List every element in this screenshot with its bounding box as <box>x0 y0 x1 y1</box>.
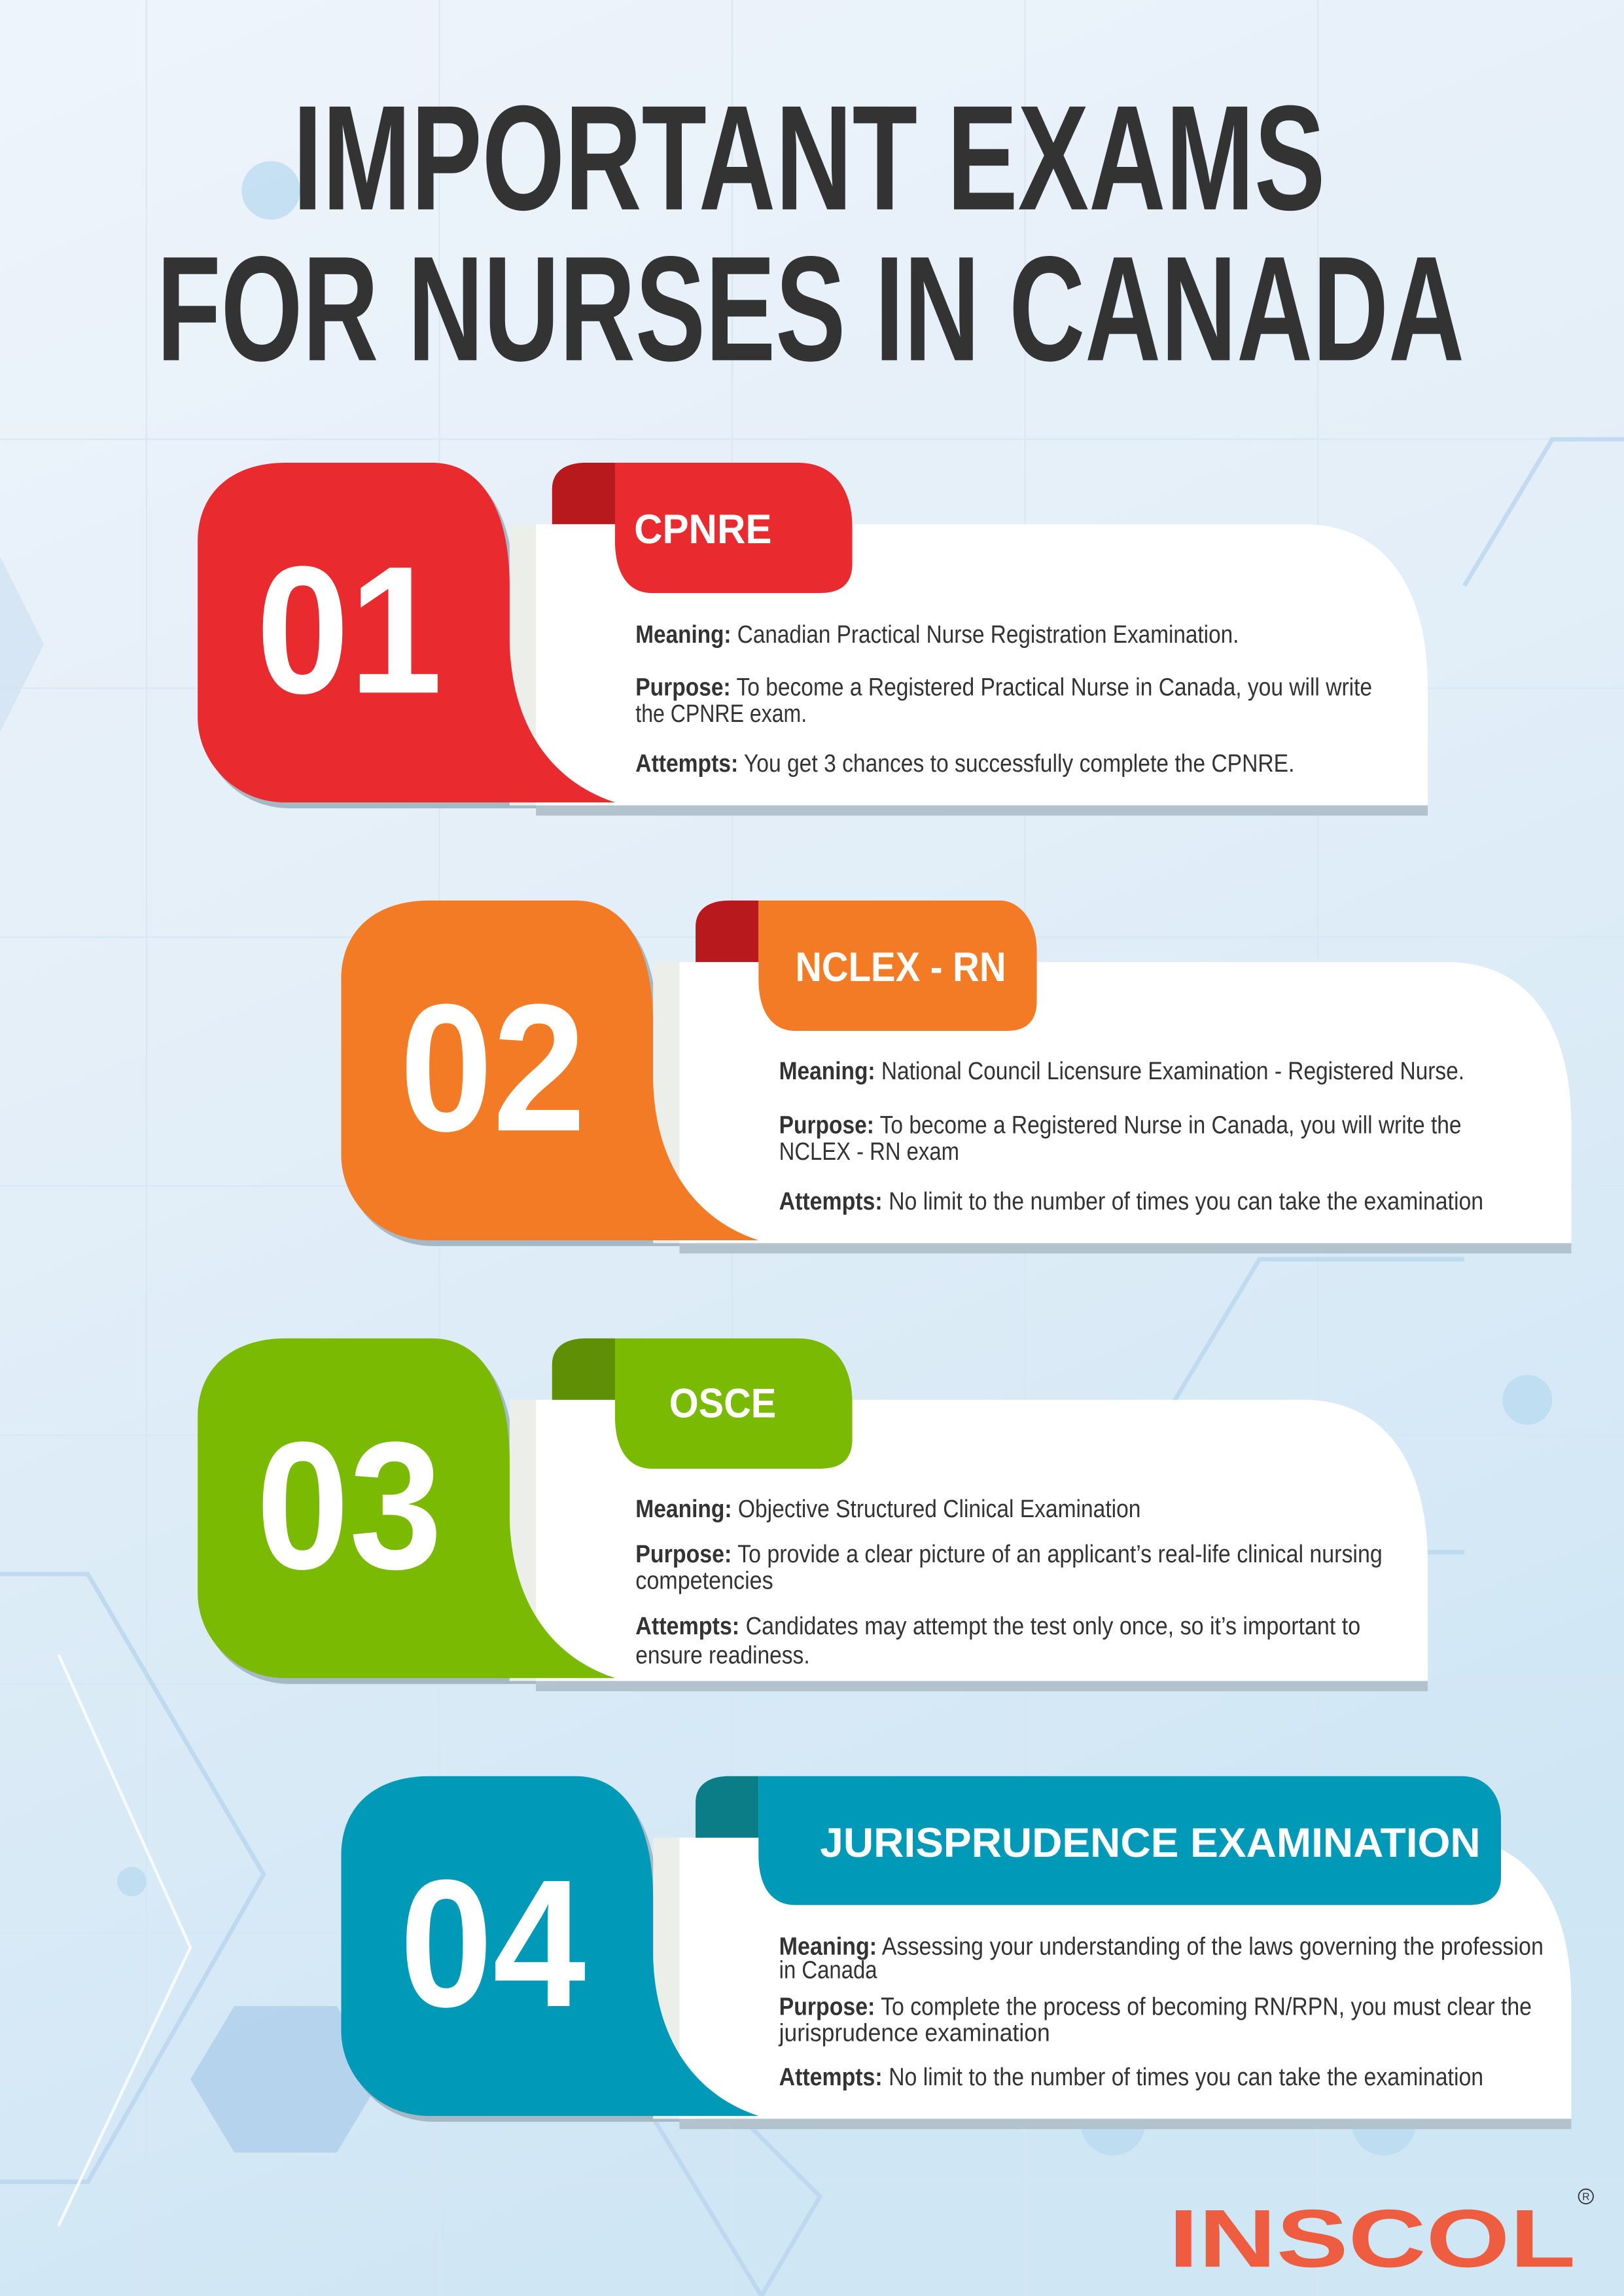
tab: CPNRE <box>615 463 853 593</box>
text: card 03 details <box>635 1496 1383 1670</box>
tab: JURISPRUDENCE EXAMINATION: JURISPRUDENCE EXAMINATION <box>820 1820 1481 1866</box>
text: card 03 details: ensure readiness. <box>635 1642 810 1670</box>
text: card 01 details: Attempts: You get 3 chances to successfully complete the CPNRE. <box>635 750 1294 778</box>
tab: NCLEX - RN: NCLEX - RN <box>795 944 1006 990</box>
number 03: 03 <box>256 1404 442 1607</box>
panel: card 01 CPNRE <box>198 463 1428 816</box>
text: card 04 details: Attempts: No limit to the number of times you can take the examination <box>779 2064 1483 2091</box>
text: card 02 details: Meaning: National Council Licensure Examination - Registered Nurse. <box>779 1058 1464 1085</box>
logo: INSCOL: INSCOL <box>1169 2193 1576 2284</box>
text: card 01 details: the CPNRE exam. <box>635 700 807 728</box>
text: card 04 details: Meaning: Assessing your understanding of the laws governing the profession <box>779 1933 1544 1961</box>
number 04: 04 <box>400 1842 587 2045</box>
text: card 03 details: competencies <box>635 1567 773 1594</box>
text: card 04 details: Purpose: To complete the process of becoming RN/RPN, you must clear the <box>779 1993 1532 2020</box>
logo: INSCOL: R <box>1582 2191 1590 2202</box>
text: card 04 details <box>779 1933 1544 2091</box>
text: card 02 details: Attempts: No limit to the number of times you can take the examination <box>779 1188 1483 1215</box>
text: card 03 details: Meaning: Objective Structured Clinical Examination <box>635 1496 1140 1523</box>
number 02: 02 <box>400 966 586 1169</box>
panel: card 02 NCLEX-RN <box>341 901 1571 1253</box>
text: card 01 details: Purpose: To become a Registered Practical Nurse in Canada, you will write <box>635 674 1372 702</box>
tab: NCLEX - RN <box>758 901 1037 1031</box>
tab: JURISPRUDENCE EXAMINATION <box>758 1776 1501 1905</box>
text: card 01 details: Meaning: Canadian Practical Nurse Registration Examination. <box>635 621 1239 649</box>
panel: card 04 Jurisprudence <box>341 1776 1571 2129</box>
text: card 02 details: NCLEX - RN exam <box>779 1138 959 1166</box>
text: card 02 details: Purpose: To become a Registered Nurse in Canada, you will write the <box>779 1112 1462 1139</box>
text: card 02 details <box>779 1058 1483 1215</box>
number 01: 01 <box>256 528 442 731</box>
text: card 04 details: in Canada <box>779 1957 877 1984</box>
panel: card 03 OSCE <box>198 1338 1428 1691</box>
tab: CPNRE: CPNRE <box>634 507 771 552</box>
title <box>156 75 1464 392</box>
tab: OSCE <box>615 1338 853 1469</box>
text: card 03 details: Attempts: Candidates may attempt the test only once, so it’s important to <box>635 1613 1360 1640</box>
text: card 01 details <box>635 621 1372 778</box>
tab: OSCE: OSCE <box>669 1381 776 1427</box>
text: card 03 details: Purpose: To provide a clear picture of an applicant’s real-life clinical nursing <box>635 1541 1383 1568</box>
text: card 04 details: jurisprudence examination <box>779 2020 1050 2047</box>
